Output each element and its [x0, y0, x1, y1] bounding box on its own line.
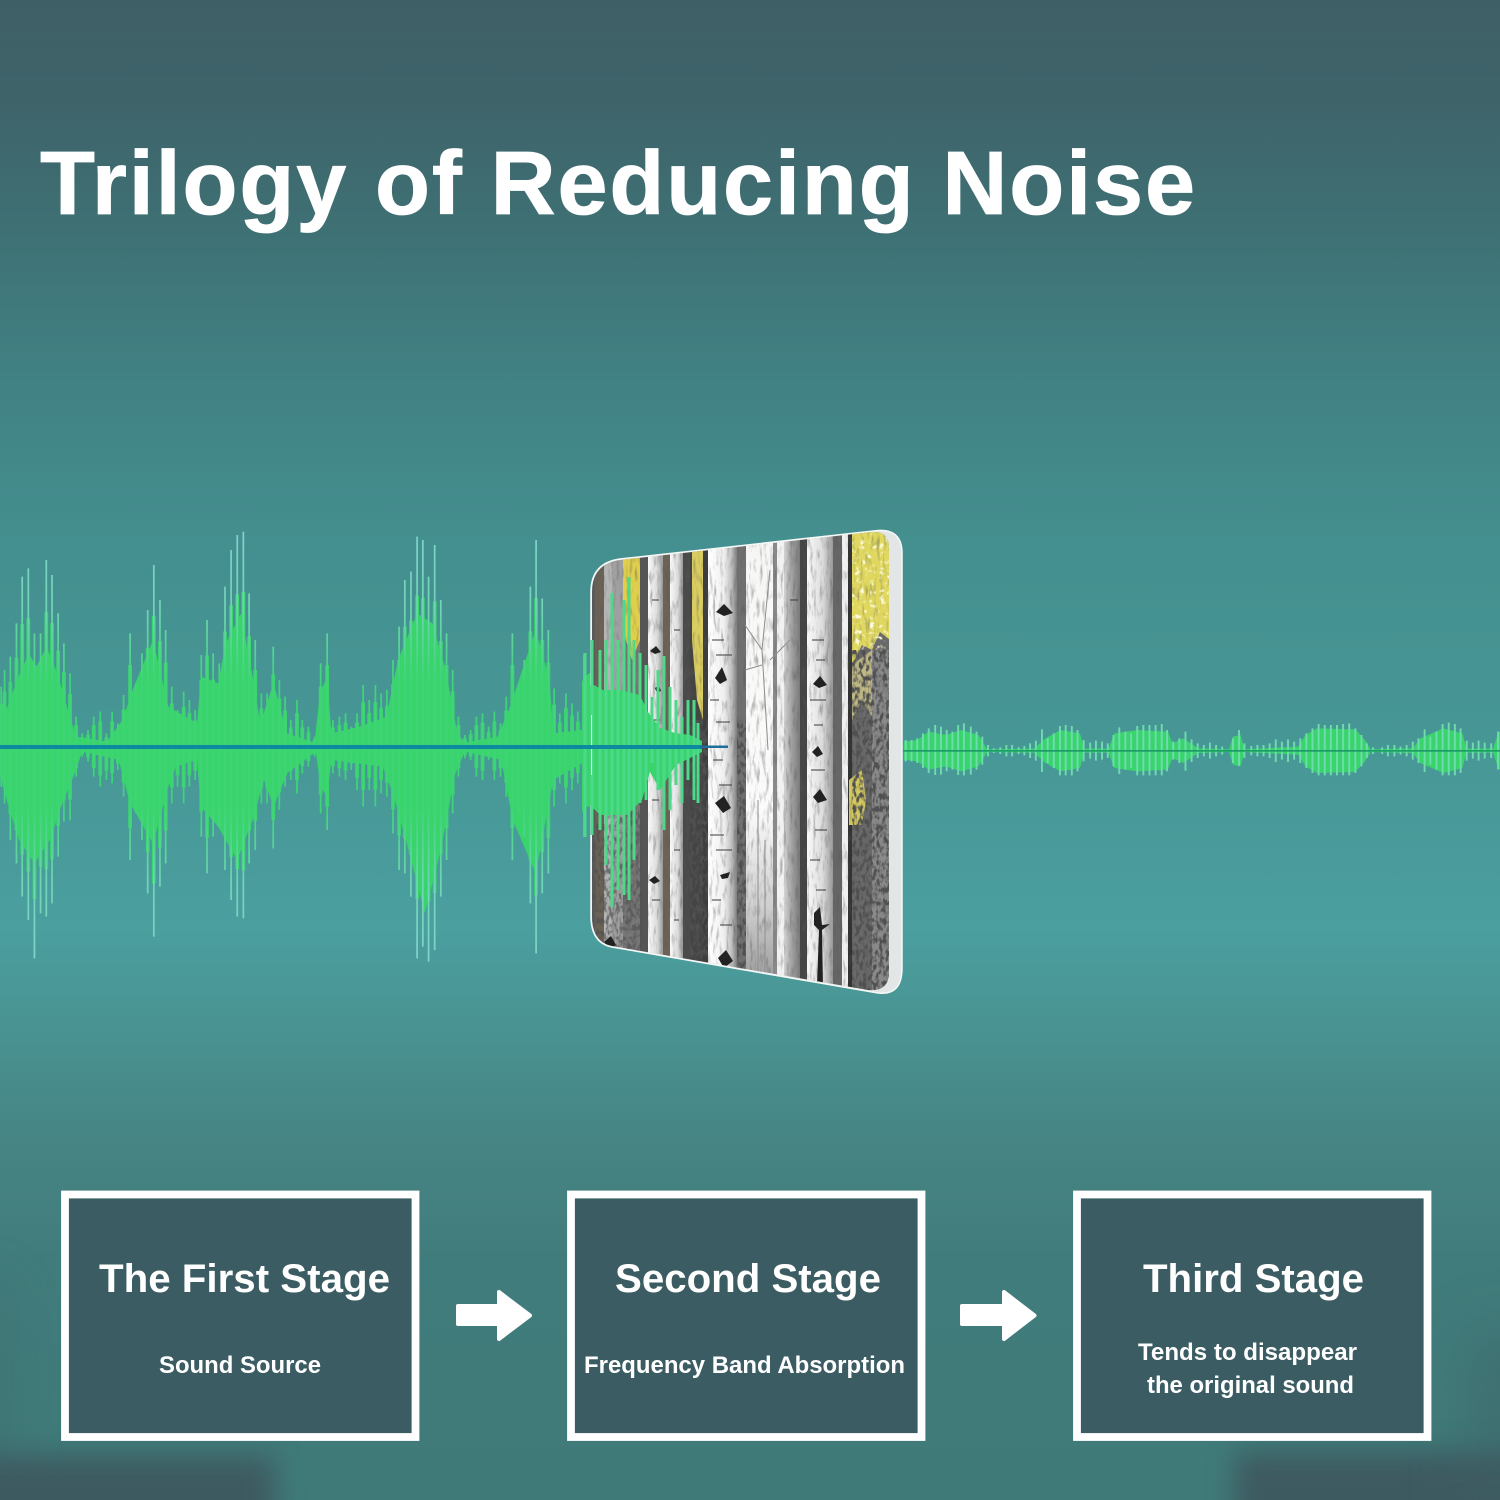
left waveform: loud sound source	[0, 532, 600, 962]
birch forest picture	[585, 525, 895, 1000]
right waveform: reduced sound	[903, 723, 1500, 775]
center line of left waveform	[0, 745, 728, 749]
description line: the original sound: the original sound	[1147, 1372, 1354, 1399]
description: sound source: Sound Source	[159, 1352, 321, 1379]
bark marks	[652, 600, 827, 925]
heading: the first stage: The First Stage	[99, 1257, 390, 1301]
stage box: second stage	[571, 1194, 922, 1437]
tree knots	[604, 604, 830, 987]
description: frequency band absorption: Frequency Band Absorption	[584, 1352, 905, 1379]
birch acoustic panel	[585, 525, 902, 1000]
waveform passing over the panel	[585, 577, 702, 907]
panel white rim	[591, 530, 902, 993]
title: Trilogy of Reducing Noise	[40, 134, 1195, 234]
heading: third stage: Third Stage	[1143, 1257, 1364, 1301]
description line: tends to disappear: Tends to disappear	[1138, 1339, 1357, 1366]
heading: second stage: Second Stage	[615, 1257, 881, 1301]
arrow: first to second stage	[458, 1292, 530, 1339]
stage box: the first stage	[65, 1194, 416, 1437]
stage box: third stage	[1077, 1194, 1428, 1437]
arrow: second to third stage	[962, 1292, 1034, 1339]
